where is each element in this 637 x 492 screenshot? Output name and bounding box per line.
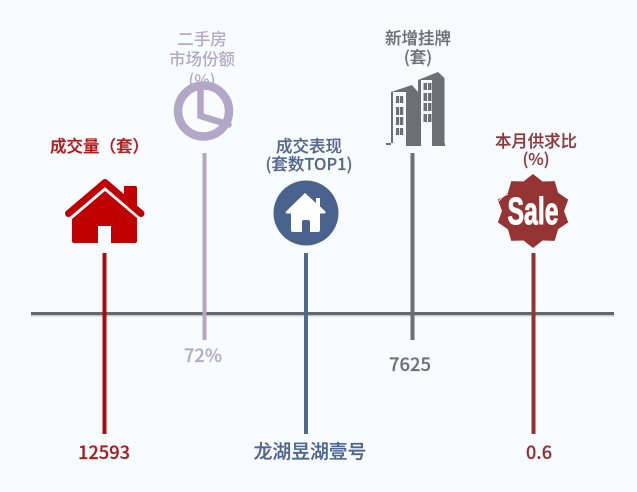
column: new listings [385, 25, 451, 377]
connector line [410, 153, 414, 340]
icon: sale badge: Sale [507, 190, 559, 232]
icon: office buildings [386, 72, 445, 146]
value: 12593: 12593 [78, 439, 130, 465]
heading: top performer: (套数TOP1) [266, 151, 352, 175]
heading: supply demand ratio: (%) [522, 146, 550, 170]
icon: pie chart [178, 86, 229, 136]
icon: sale badge [498, 174, 568, 248]
column: resale market share [169, 26, 236, 368]
value: 72%: 72% [184, 342, 222, 368]
value: project name: 龙湖昱湖壹号 [254, 437, 366, 464]
connector line [202, 153, 206, 340]
connector line [304, 253, 308, 434]
heading: resale market share: (%) [188, 67, 216, 91]
column: transaction volume [50, 133, 149, 465]
heading: new listings: 新增挂牌 [385, 25, 451, 49]
icon: red house [68, 182, 141, 243]
heading: resale market share: 市场份额 [169, 46, 236, 70]
heading: transaction volume: 成交量（套） [50, 133, 149, 157]
heading: resale market share: 二手房 [177, 26, 227, 50]
column: supply demand ratio [495, 128, 577, 465]
heading: new listings: (套) [404, 44, 432, 68]
connector line [102, 253, 106, 434]
value: 0.6: 0.6 [526, 439, 552, 465]
value: 7625: 7625 [389, 351, 431, 377]
icon: house in circle [274, 180, 338, 246]
heading: supply demand ratio: 本月供求比 [495, 128, 577, 152]
column: top performer [254, 133, 366, 464]
timeline axis [31, 312, 614, 316]
heading: top performer: 成交表现 [276, 133, 342, 157]
connector line [532, 253, 536, 434]
